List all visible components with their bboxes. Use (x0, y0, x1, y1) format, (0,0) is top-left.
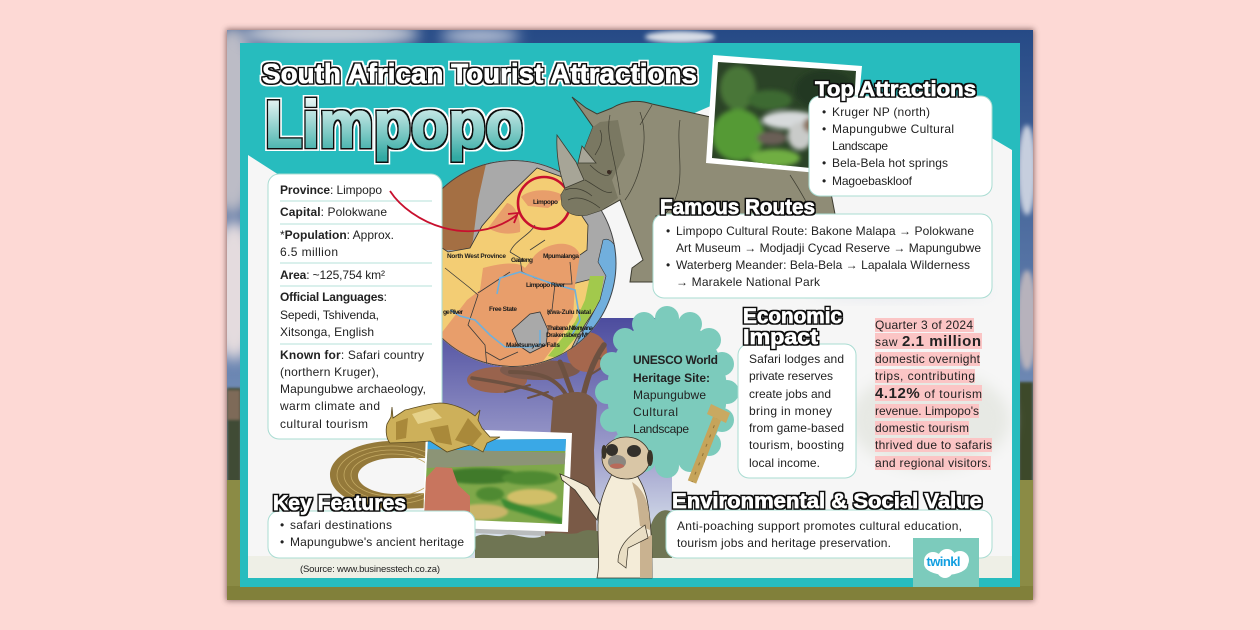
statistics lines: Quarter 3 of 2024 (875, 318, 973, 332)
heading: economic impact: Impact (743, 326, 818, 349)
logo: twinkl: twinkl (926, 554, 960, 569)
list: key features: • (280, 535, 284, 549)
list: key features (280, 518, 464, 549)
cloud text (633, 353, 718, 436)
cloud text: Landscape (633, 422, 689, 436)
panel: province facts (268, 174, 442, 439)
map: South Africa land (442, 168, 598, 367)
economic text (749, 352, 844, 470)
map labels: Mpumalanga (543, 253, 579, 260)
economic text: from game-based (749, 421, 844, 435)
cloud text: Heritage Site: (633, 371, 710, 385)
source note: (Source: www.businesstech.co.za) (300, 564, 440, 575)
map labels: North West Province (447, 253, 506, 260)
map labels: Limpopo River (526, 282, 565, 289)
environmental text: Anti-poaching support promotes cultural education, (677, 519, 962, 533)
meerkat ears and eyes (602, 444, 653, 469)
fact text lines: Xitsonga, English (280, 325, 374, 339)
fact text lines: warm climate and (279, 399, 380, 413)
economic text: Safari lodges and (749, 352, 844, 366)
list: routes: • (666, 258, 670, 272)
list: attractions: • (822, 105, 826, 119)
heading: economic impact (743, 305, 842, 349)
heading: key features: Key Features (273, 492, 406, 515)
statistics lines: saw 2.1 million (875, 333, 981, 350)
panel: top attractions (809, 96, 992, 196)
map: rivers (450, 272, 580, 347)
economic text: local income. (749, 456, 820, 470)
icon: golden sceptre (692, 404, 730, 482)
meerkat shoulder shading (632, 482, 650, 530)
heading: top attractions: Top Attractions (815, 78, 976, 101)
fact text lines: Known for: Safari country (280, 348, 424, 362)
fact text lines (279, 183, 426, 431)
fact text lines: Area: ~125,754 km² (280, 268, 385, 282)
poster shadow (226, 29, 1034, 601)
list: attractions: Mapungubwe Cultural (832, 122, 954, 136)
meerkat head (602, 437, 650, 479)
text block: tourism statistics (875, 318, 992, 470)
teal frame with angled top edge (240, 43, 1020, 587)
map: orange zones (442, 190, 580, 367)
statistics lines: domestic tourism (875, 421, 969, 435)
statistics lines: revenue. Limpopo's (875, 404, 979, 418)
cloud text: Mapungubwe (633, 388, 706, 402)
callout: red circle around Limpopo (518, 177, 570, 229)
fact text lines: Province: Limpopo (280, 183, 382, 197)
meerkat body (597, 474, 652, 578)
map labels: Maletsunyane Falls (506, 342, 560, 349)
map labels: Gauteng (511, 257, 533, 264)
map: Lesotho (512, 312, 548, 353)
statistics lines: thrived due to safaris (875, 438, 992, 452)
fact text lines: cultural tourism (280, 417, 368, 431)
illustration: meerkat (560, 437, 653, 578)
panel: economic impact (738, 344, 856, 478)
map: ocean (574, 238, 616, 347)
rhino front horn (557, 135, 584, 188)
title: Limpopo: Limpopo (265, 87, 523, 161)
list: attractions: • (822, 156, 826, 170)
panel: environmental and social value (666, 510, 992, 558)
rhino head shading (561, 120, 625, 216)
cloud text: UNESCO World (633, 353, 718, 367)
economic text: private reserves (749, 369, 833, 383)
panel: famous routes (653, 214, 992, 298)
list: routes: → Marakele National Park (676, 275, 821, 289)
bushes (475, 510, 672, 558)
map labels: Thabana Ntlenyana (547, 325, 593, 332)
list: attractions (822, 105, 954, 188)
environmental text: tourism jobs and heritage preservation. (677, 536, 891, 550)
rhino second horn (578, 146, 596, 163)
list: routes (666, 224, 981, 289)
translucent white inner panel (248, 100, 1012, 578)
list: routes: Limpopo Cultural Route: Bakone Malapa → Polokwane (676, 224, 974, 238)
fact text lines: Official Languages: (280, 290, 387, 304)
list: routes: Waterberg Meander: Bela-Bela → Lapalala Wilderness (676, 258, 970, 272)
map: borders (445, 225, 572, 368)
scene: purple sky with baobab (442, 318, 672, 558)
statistics lines: and regional visitors. (875, 456, 991, 470)
photo: Mapungubwe landscape (420, 428, 572, 536)
list: key features: Mapungubwe's ancient heritage (290, 535, 464, 549)
statistics lines: trips, contributing (875, 369, 975, 383)
list: attractions: • (822, 174, 826, 188)
map labels: ge River (443, 309, 463, 316)
arrow: province label to map (390, 191, 518, 231)
cloud text: Cultural (633, 405, 678, 419)
list: attractions: Bela-Bela hot springs (832, 156, 948, 170)
highlights behind text (875, 318, 992, 470)
cloud: UNESCO world heritage (595, 306, 739, 478)
panel: key features (268, 511, 475, 558)
meerkat arm (560, 474, 600, 520)
environmental text (677, 519, 962, 550)
logo: twinkl (913, 538, 979, 587)
fact text lines: Mapungubwe archaeology, (280, 382, 426, 396)
heading: famous routes: Famous Routes (660, 196, 815, 219)
statistics lines: domestic overnight (875, 352, 981, 366)
list: attractions: Magoebaskloof (832, 174, 913, 188)
map labels: Drakensberg Mts (546, 332, 592, 339)
economic text: tourism, boosting (749, 438, 844, 452)
fact text lines: (northern Kruger), (280, 365, 379, 379)
dividers between facts (280, 201, 432, 344)
map labels: Limpopo (533, 199, 558, 206)
map: green coast (548, 276, 604, 358)
list: routes: • (666, 224, 670, 238)
background photo: sky and grassland (202, 20, 1037, 600)
heading: environmental and social value: Environmental & Social Value (672, 490, 982, 513)
statistics lines: 4.12% of tourism (875, 385, 982, 402)
title: South African Tourist Attractions: South African Tourist Attractions (262, 58, 697, 89)
economic text: bring in money (749, 404, 832, 418)
photo: waterfall (706, 55, 862, 172)
map labels: Kwa-Zulu Natal (547, 309, 591, 316)
statistics lines (875, 318, 992, 470)
illustration: golden wire coil (330, 441, 447, 509)
list: routes: Art Museum → Modjadji Cycad Reserve → Mapungubwe (676, 241, 981, 255)
list: attractions: Kruger NP (north) (832, 105, 930, 119)
map labels (443, 199, 593, 349)
meerkat lower fur shading (640, 535, 652, 578)
list: key features: safari destinations (290, 518, 392, 532)
economic text: create jobs and (749, 387, 831, 401)
fact text lines: 6.5 million (280, 245, 338, 259)
fact text lines: Capital: Polokwane (280, 205, 387, 219)
map: Botswana brown area (442, 164, 486, 250)
map of South Africa (442, 160, 616, 367)
fact text lines: Sepedi, Tshivenda, (280, 308, 379, 322)
rhino eye (607, 170, 611, 174)
illustration: golden rhino of Mapungubwe (386, 403, 500, 452)
fact text lines: *Population: Approx. (280, 228, 394, 242)
list: attractions: Landscape (832, 139, 888, 153)
map labels: Free State (489, 306, 517, 313)
illustration: rhinoceros (557, 97, 835, 282)
heading: economic impact: Economic (743, 305, 842, 328)
list: key features: • (280, 518, 284, 532)
baobab tree (467, 332, 610, 548)
rhino wrinkle lines (565, 105, 812, 214)
list: attractions: • (822, 122, 826, 136)
meerkat paw (618, 525, 648, 568)
